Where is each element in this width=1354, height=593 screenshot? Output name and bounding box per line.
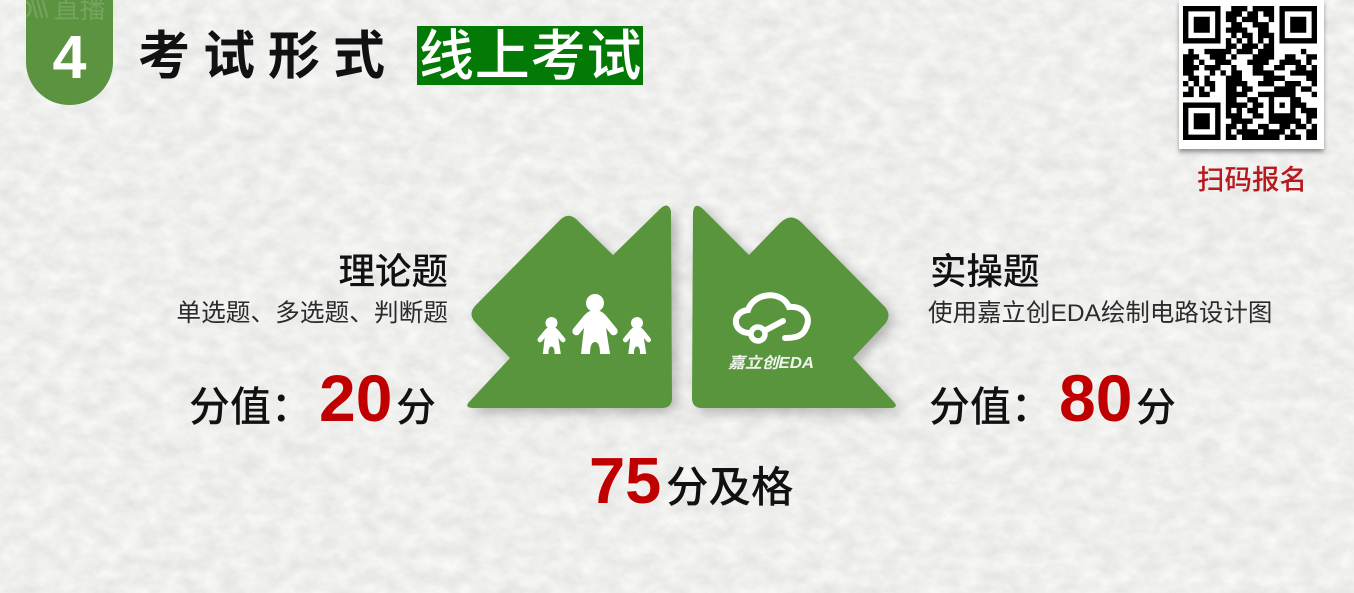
QR code card: [1179, 0, 1324, 149]
left green arrow panel: theory: [467, 205, 672, 408]
QR caption: 扫码报名: [1197, 164, 1307, 195]
section number badge: [26, 0, 113, 105]
passing score: 75: [589, 444, 661, 517]
passing score: [589, 444, 794, 517]
theory score: 20: [319, 361, 392, 435]
icon: three people: [537, 294, 651, 354]
practical block: [928, 251, 1272, 435]
theory score: 分: [396, 386, 436, 430]
theory score: [189, 361, 436, 435]
number 4: 4: [53, 23, 86, 91]
practical score: 分: [1136, 386, 1176, 430]
theory heading: 理论题: [338, 251, 448, 292]
title: exam format: 考试形式: [138, 28, 398, 86]
practical score: 分值：: [929, 384, 1052, 430]
practical description: 使用嘉立创EDA绘制电路设计图: [928, 300, 1272, 327]
practical score: 80: [1059, 361, 1132, 435]
theory block: [176, 251, 448, 435]
practical heading: 实操题: [930, 251, 1040, 292]
theory score: 分值：: [189, 384, 312, 430]
theory description: 单选题、多选题、判断题: [176, 300, 448, 327]
passing score: 分及格: [666, 465, 794, 512]
right green arrow panel: practical: [692, 206, 896, 408]
practical score: [929, 361, 1176, 435]
icon: cloud EDA logo: [728, 295, 814, 372]
icon: cloud EDA logo: 嘉立创EDA: [728, 354, 814, 372]
